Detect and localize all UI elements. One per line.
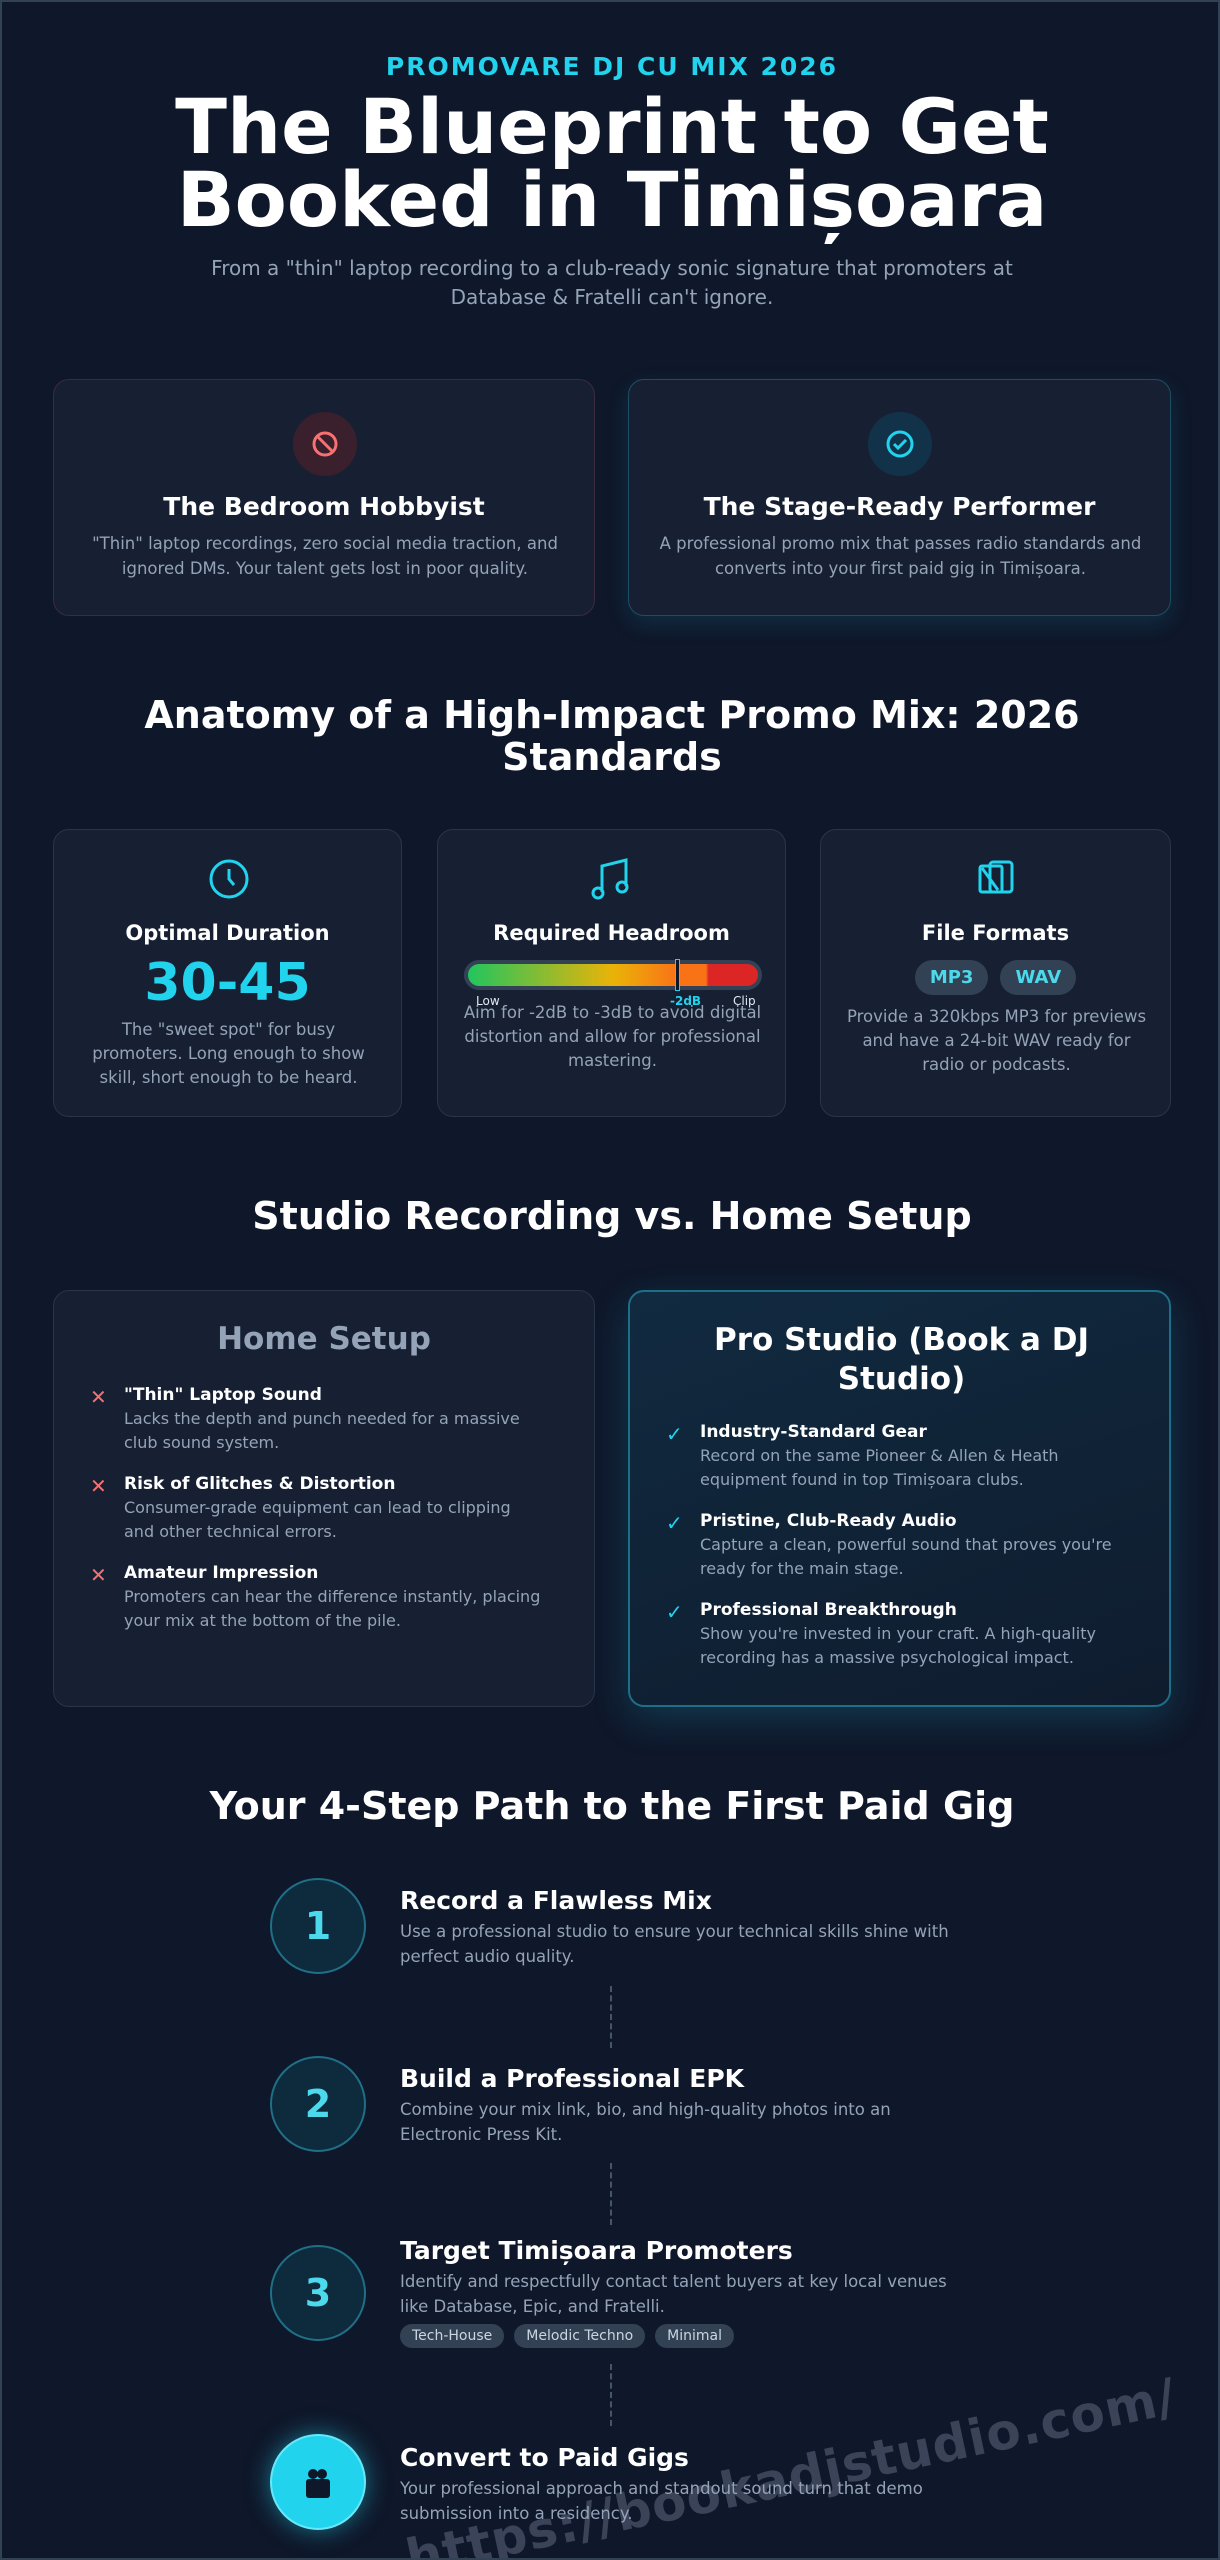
dashed connector [610,2163,612,2225]
panel: stage-ready performer [628,379,1171,616]
step 1: Use a professional studio to ensure your technical skills shine with perfect audio quality. [400,1922,949,1966]
kicker: PROMOVARE DJ CU MIX 2026 [386,52,838,81]
item: amateur: Promoters can hear the difference instantly, placing your mix at the bottom of the pile. [124,1587,540,1630]
subtitle: From a "thin" laptop recording to a club-ready sonic signature that promoters at Database & Fratelli can't ignore. [211,256,1013,309]
item: amateur [90,1563,540,1630]
genre tags: Minimal [667,2328,722,2344]
step 1: 1 [305,1904,331,1948]
section heading: anatomy [144,693,1080,779]
list [90,1385,540,1630]
step 4: Convert to Paid Gigs [400,2443,689,2472]
meter chart: -2dB [670,994,701,1008]
dashed connector [610,1986,612,2048]
meter chart: Low [476,994,500,1008]
panel: required headroom [437,829,786,1117]
item: glitches [90,1474,511,1541]
icon: files [978,860,1014,894]
item: breakthrough: Show you're invested in your craft. A high-quality recording has a massive psychological impact. [700,1624,1096,1667]
format pills: WAV [1015,967,1061,988]
step 1: Record a Flawless Mix [400,1886,712,1915]
icon: ban [293,412,357,476]
text: Provide a 320kbps MP3 for previews and have a 24-bit WAV ready for radio or podcasts. [847,1007,1146,1074]
panel: home setup: ✕ [90,1385,107,1409]
item: glitches: Consumer-grade equipment can lead to clipping and other technical errors. [124,1498,511,1541]
icon: music note [592,858,628,900]
title: Booked in Timișoara [177,155,1047,244]
dashed connector [610,2364,612,2426]
section heading: anatomy: Anatomy of a High-Impact Promo Mix: 2026 [144,693,1080,737]
panel: home setup: ✕ [90,1563,107,1587]
step 4: Your professional approach and standout sound turn that demo submission into a residency. [400,2479,923,2523]
step 2: Build a Professional EPK [400,2064,744,2093]
item: audio: Pristine, Club-Ready Audio [700,1511,957,1531]
item: audio: Capture a clean, powerful sound that proves you're ready for the main stage. [700,1535,1112,1578]
item: breakthrough [666,1600,1096,1667]
meter chart [464,959,762,1008]
genre tags [400,2324,734,2348]
heading: The Bedroom Hobbyist [163,492,485,521]
text: "Thin" laptop recordings, zero social media traction, and ignored DMs. Your talent gets lost in poor quality. [92,534,558,578]
step 2: Combine your mix link, bio, and high-quality photos into an Electronic Press Kit. [400,2100,891,2144]
item: gear: Industry-Standard Gear [700,1422,927,1442]
heading: Home Setup [217,1321,431,1357]
step 3: 3 [305,2271,331,2315]
item: breakthrough: Professional Breakthrough [700,1600,957,1620]
item: thin sound: Lacks the depth and punch needed for a massive club sound system. [124,1409,520,1452]
step 2: 2 [305,2082,331,2126]
panel: pro studio [628,1290,1171,1707]
section heading: anatomy: Standards [502,735,722,779]
step 3 [270,2236,947,2348]
stat: 30-45 [144,953,311,1013]
item: amateur: Amateur Impression [124,1563,318,1583]
format pills [915,960,1076,995]
list [666,1422,1112,1667]
step 3: Target Timișoara Promoters [400,2236,793,2265]
panel: pro studio: ✓ [666,1422,683,1446]
step 2 [270,2056,891,2152]
section heading: 4-step path: Your 4-Step Path to the First Paid Gig [210,1784,1014,1828]
panel: optimal duration [53,829,402,1117]
title: The Blueprint to Get [175,82,1049,171]
icon: check [868,412,932,476]
panel: home setup [53,1290,595,1707]
item: gear [666,1422,1059,1489]
step 4 [256,2420,923,2544]
heading: Required Headroom [493,921,730,945]
title [175,82,1049,244]
format pills: MP3 [930,967,973,988]
heading: Pro Studio (Book a DJ Studio) [714,1322,1089,1397]
text: The "sweet spot" for busy promoters. Long enough to show skill, short enough to be heard. [92,1020,365,1087]
heading: Optimal Duration [125,921,330,945]
section heading: studio vs home: Studio Recording vs. Home Setup [252,1194,972,1238]
panel: bedroom hobbyist [53,379,595,616]
step 3: Identify and respectfully contact talent buyers at key local venues like Database, Epic, and Fratelli. [400,2272,947,2316]
panel: pro studio: ✓ [666,1600,683,1624]
panel: file formats [820,829,1171,1117]
panel: home setup: ✕ [90,1474,107,1498]
item: glitches: Risk of Glitches & Distortion [124,1474,395,1494]
panel: pro studio: ✓ [666,1511,683,1535]
step 1 [270,1878,949,1974]
genre tags: Melodic Techno [526,2328,633,2344]
icon: clock [210,860,248,898]
item: gear: Record on the same Pioneer & Allen & Heath equipment found in top Timișoara clubs. [700,1446,1059,1489]
item: thin sound [90,1385,520,1452]
meter chart: Clip [733,994,756,1008]
text: A professional promo mix that passes radio standards and converts into your first paid gig in Timișoara. [660,534,1141,578]
heading: The Stage-Ready Performer [704,492,1095,521]
item: audio [666,1511,1112,1578]
text: Aim for -2dB to -3dB to avoid digital distortion and allow for professional mastering. [464,1003,761,1070]
heading: File Formats [922,921,1069,945]
genre tags: Tech-House [412,2328,492,2344]
item: thin sound: "Thin" Laptop Sound [124,1385,322,1405]
